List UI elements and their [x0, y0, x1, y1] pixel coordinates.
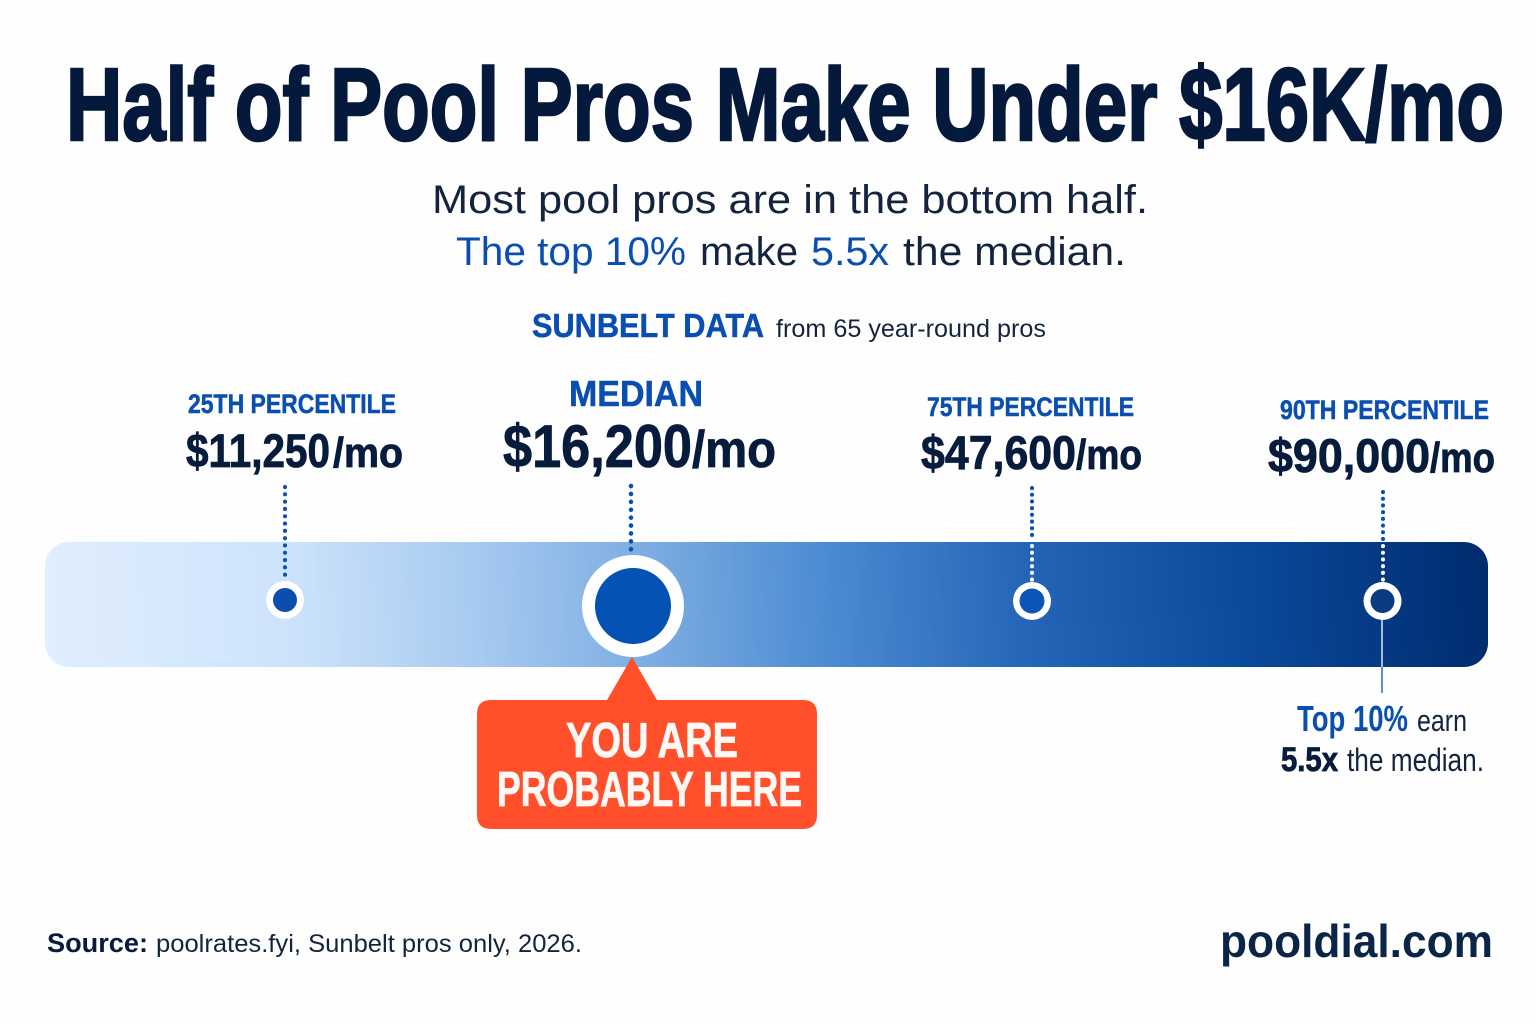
subtitle: 5.5x: [811, 230, 889, 274]
callout: you are probably here: YOU ARE: [566, 714, 738, 768]
label: 75th percentile: [921, 392, 1142, 479]
subtitle: make: [700, 230, 798, 274]
callout: you are probably here: [477, 657, 817, 829]
label: 25th percentile: /mo: [333, 429, 403, 476]
label: median: $16,200: [503, 413, 692, 480]
label: 90th percentile: $90,000: [1268, 429, 1430, 482]
label: 90th percentile: [1268, 395, 1495, 482]
label: 25th percentile: 25TH PERCENTILE: [188, 389, 396, 419]
note: top 10%: [1281, 698, 1484, 779]
subtitle: [432, 178, 1148, 274]
marker: 75th percentile: [1013, 488, 1051, 620]
label: median: /mo: [692, 421, 776, 479]
data note: [532, 307, 1046, 344]
marker: 25th percentile: [266, 487, 304, 619]
note: top 10%: Top 10%: [1297, 698, 1408, 739]
note: top 10%: earn: [1417, 703, 1467, 738]
note: top 10%: the median.: [1347, 742, 1484, 778]
marker: median: [582, 486, 684, 657]
label: 25th percentile: [186, 389, 403, 477]
subtitle: the median.: [903, 230, 1126, 274]
subtitle: Most pool pros are in the bottom half.: [432, 178, 1148, 222]
subtitle: The top 10%: [456, 230, 686, 274]
data note: from 65 year-round pros: [776, 315, 1046, 343]
label: 90th percentile: /mo: [1430, 434, 1495, 481]
label: median: MEDIAN: [569, 373, 703, 414]
note: top 10%: 5.5x: [1281, 741, 1338, 779]
source: poolrates.fyi, Sunbelt pros only, 2026.: [156, 930, 582, 958]
data note: SUNBELT DATA: [532, 307, 764, 344]
label: 75th percentile: 75TH PERCENTILE: [927, 392, 1134, 422]
label: 75th percentile: $47,600: [921, 426, 1076, 479]
label: 75th percentile: /mo: [1076, 431, 1142, 478]
source: Source:: [47, 928, 148, 958]
label: 25th percentile: $11,250: [186, 424, 330, 477]
brand: pooldial.com: [1220, 915, 1493, 967]
callout: you are probably here: PROBABLY HERE: [497, 763, 802, 817]
label: median: [503, 373, 776, 480]
label: 90th percentile: 90TH PERCENTILE: [1280, 395, 1489, 425]
marker: 90th percentile: [1364, 492, 1402, 693]
gradient percentile bar: [45, 542, 1488, 667]
